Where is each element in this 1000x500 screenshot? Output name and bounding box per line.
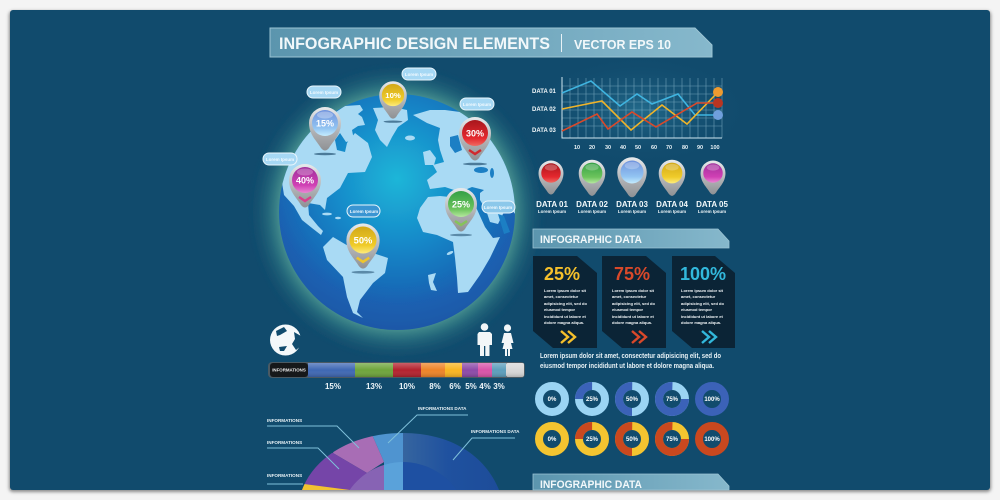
- icon: small globe: [270, 324, 301, 356]
- chart series labels: DATA 03: [532, 128, 557, 134]
- pin labels: Lorem Ipsum: [310, 90, 338, 95]
- section banner: infographic data: [533, 229, 729, 248]
- section banner: bottom: INFOGRAPHIC DATA: [540, 479, 642, 491]
- pin: 10%: 10%: [385, 91, 401, 100]
- line chart: [530, 55, 750, 165]
- title banner: [270, 28, 712, 57]
- section banner: infographic data: INFOGRAPHIC DATA: [540, 234, 642, 246]
- card: 25%: 25%: [544, 264, 580, 284]
- legend captions: DATA 02: [576, 200, 608, 209]
- stacked percentage bar: [268, 362, 525, 378]
- chart series labels: DATA 01: [532, 89, 557, 95]
- pin: 30%: [459, 117, 491, 165]
- chart axis labels: 30: [605, 145, 611, 151]
- legend pin: data 01: [539, 161, 563, 194]
- pie leader: informations 1: INFORMATIONS: [267, 418, 302, 423]
- legend pin: data 05: [701, 161, 725, 194]
- title banner: VECTOR EPS 10: [574, 37, 671, 52]
- section banner: bottom: [533, 474, 729, 491]
- legend pin: data 02: [579, 160, 605, 196]
- card: 100%: adipisicing elit, sed do: [681, 301, 724, 306]
- card: 100%: [672, 256, 735, 348]
- card: 100%: Lorem ipsum dolor sit: [681, 288, 724, 293]
- card: 75%: amet, consectetur: [612, 294, 647, 299]
- bar percentages: 5%: [465, 382, 477, 391]
- legend captions: Lorem Ipsum: [578, 209, 606, 214]
- chart axis labels: 70: [666, 145, 672, 151]
- donut row: blue: 25%: [586, 397, 599, 403]
- card: 75%: Lorem ipsum dolor sit: [612, 288, 655, 293]
- donut row: orange: 25%: [586, 437, 599, 443]
- donut row: orange: 100%: [704, 437, 720, 443]
- pie leader: informations 2: [267, 440, 339, 469]
- card: 75%: adipisicing elit, sed do: [612, 301, 655, 306]
- card: 100%: amet, consectetur: [681, 294, 716, 299]
- bar percentages: 6%: [449, 382, 461, 391]
- chart series labels: DATA 02: [532, 107, 557, 113]
- pin labels: Lorem Ipsum: [463, 102, 491, 107]
- icon: man: [478, 323, 492, 356]
- pie leader: informations 3: INFORMATIONS: [267, 473, 302, 478]
- pie leader: informations data right: INFORMATIONS DATA: [471, 429, 520, 434]
- pin: 25%: 25%: [452, 200, 470, 210]
- chart axis labels: 100: [710, 145, 720, 151]
- donut row: blue: 50%: [626, 397, 639, 403]
- card: 75%: 75%: [614, 264, 650, 284]
- card: 25%: dolore magna aliqua.: [544, 320, 584, 325]
- card: 25%: eiusmod tempor: [544, 307, 576, 312]
- paragraph: Lorem ipsum dolor sit amet, consectetur adipisicing elit, sed do: [540, 353, 721, 360]
- legend captions: DATA 04: [656, 200, 688, 209]
- pin: 30%: 30%: [466, 128, 484, 138]
- chart axis labels: 50: [635, 145, 641, 151]
- donut row: blue: 0%: [548, 397, 557, 403]
- pin: 15%: [309, 107, 341, 155]
- bar percentages: [325, 382, 505, 391]
- card: 75%: eiusmod tempor: [612, 307, 644, 312]
- bar percentages: 4%: [479, 382, 491, 391]
- globe with continents: [258, 73, 536, 350]
- donut row: orange: [539, 426, 725, 452]
- pin labels: Lorem Ipsum: [350, 209, 378, 214]
- paragraph: [540, 353, 721, 370]
- donut row: blue: 100%: [704, 397, 720, 403]
- donut row: orange: 75%: [666, 437, 679, 443]
- card: 25%: amet, consectetur: [544, 294, 579, 299]
- donut row: orange: 50%: [626, 437, 639, 443]
- card: 100%: 100%: [680, 264, 726, 284]
- pin: 40%: 40%: [296, 176, 314, 186]
- legend captions: DATA 01: [536, 200, 568, 209]
- pie leader: informations 2: INFORMATIONS: [267, 440, 302, 445]
- pie leader: informations 1: [267, 418, 359, 448]
- pin labels: [263, 68, 515, 217]
- card: 75%: incididunt ut labore et: [612, 314, 654, 319]
- card: 100%: eiusmod tempor: [681, 307, 713, 312]
- card: 25%: adipisicing elit, sed do: [544, 301, 587, 306]
- pie leader: informations data right: [453, 429, 520, 460]
- pin: 50%: [346, 223, 380, 274]
- card: 25%: incididunt ut labore et: [544, 314, 586, 319]
- legend captions: Lorem Ipsum: [538, 209, 566, 214]
- pin: 50%: 50%: [354, 236, 373, 246]
- bar percentages: 10%: [399, 382, 415, 391]
- pie leader: informations data top: [388, 406, 468, 443]
- donut row: orange: 0%: [548, 437, 557, 443]
- pin: 25%: [445, 188, 477, 236]
- pie leader: informations 3: [267, 473, 303, 484]
- pin labels: Lorem Ipsum: [484, 205, 512, 210]
- legend captions: DATA 03: [616, 200, 648, 209]
- pie leader: informations data top: INFORMATIONS DATA: [418, 406, 467, 411]
- stacked percentage bar: INFORMATIONS: [272, 368, 306, 372]
- pin labels: Lorem Ipsum: [405, 72, 433, 77]
- pin labels: Lorem Ipsum: [266, 157, 294, 162]
- card: 75%: dolore magna aliqua.: [612, 320, 652, 325]
- legend captions: Lorem Ipsum: [698, 209, 726, 214]
- bar percentages: 15%: [325, 382, 341, 391]
- bar percentages: 3%: [493, 382, 505, 391]
- chart axis labels: 40: [620, 145, 626, 151]
- chart axis labels: 10: [574, 145, 580, 151]
- card: 75%: [602, 256, 666, 348]
- chart series labels: [532, 89, 557, 134]
- chart axis labels: 90: [697, 145, 703, 151]
- legend captions: [536, 200, 728, 214]
- card: 25%: Lorem ipsum dolor sit: [544, 288, 587, 293]
- chart axis labels: 20: [589, 145, 595, 151]
- semicircle chart: [300, 430, 503, 490]
- card: 25%: [533, 256, 597, 348]
- paragraph: eiusmod tempor incididunt ut labore et dolore magna aliqua.: [540, 363, 714, 370]
- bar percentages: 8%: [429, 382, 441, 391]
- pin: 40%: [289, 164, 321, 208]
- chart axis labels: [574, 145, 720, 151]
- card: 100%: dolore magna aliqua.: [681, 320, 721, 325]
- donut row: blue: [539, 386, 725, 412]
- chart axis labels: 80: [682, 145, 688, 151]
- donut row: blue: 75%: [666, 397, 679, 403]
- card: 100%: incididunt ut labore et: [681, 314, 723, 319]
- title banner: INFOGRAPHIC DESIGN ELEMENTS: [279, 34, 550, 53]
- legend captions: Lorem Ipsum: [658, 209, 686, 214]
- icon: woman: [502, 324, 514, 356]
- chart axis labels: 60: [651, 145, 657, 151]
- legend captions: DATA 05: [696, 200, 728, 209]
- pin: 15%: 15%: [316, 118, 334, 128]
- legend pin: data 04: [659, 160, 685, 196]
- legend captions: Lorem Ipsum: [618, 209, 646, 214]
- pin: 10%: [379, 81, 407, 123]
- bar percentages: 13%: [366, 382, 382, 391]
- legend pin: data 03: [617, 157, 647, 197]
